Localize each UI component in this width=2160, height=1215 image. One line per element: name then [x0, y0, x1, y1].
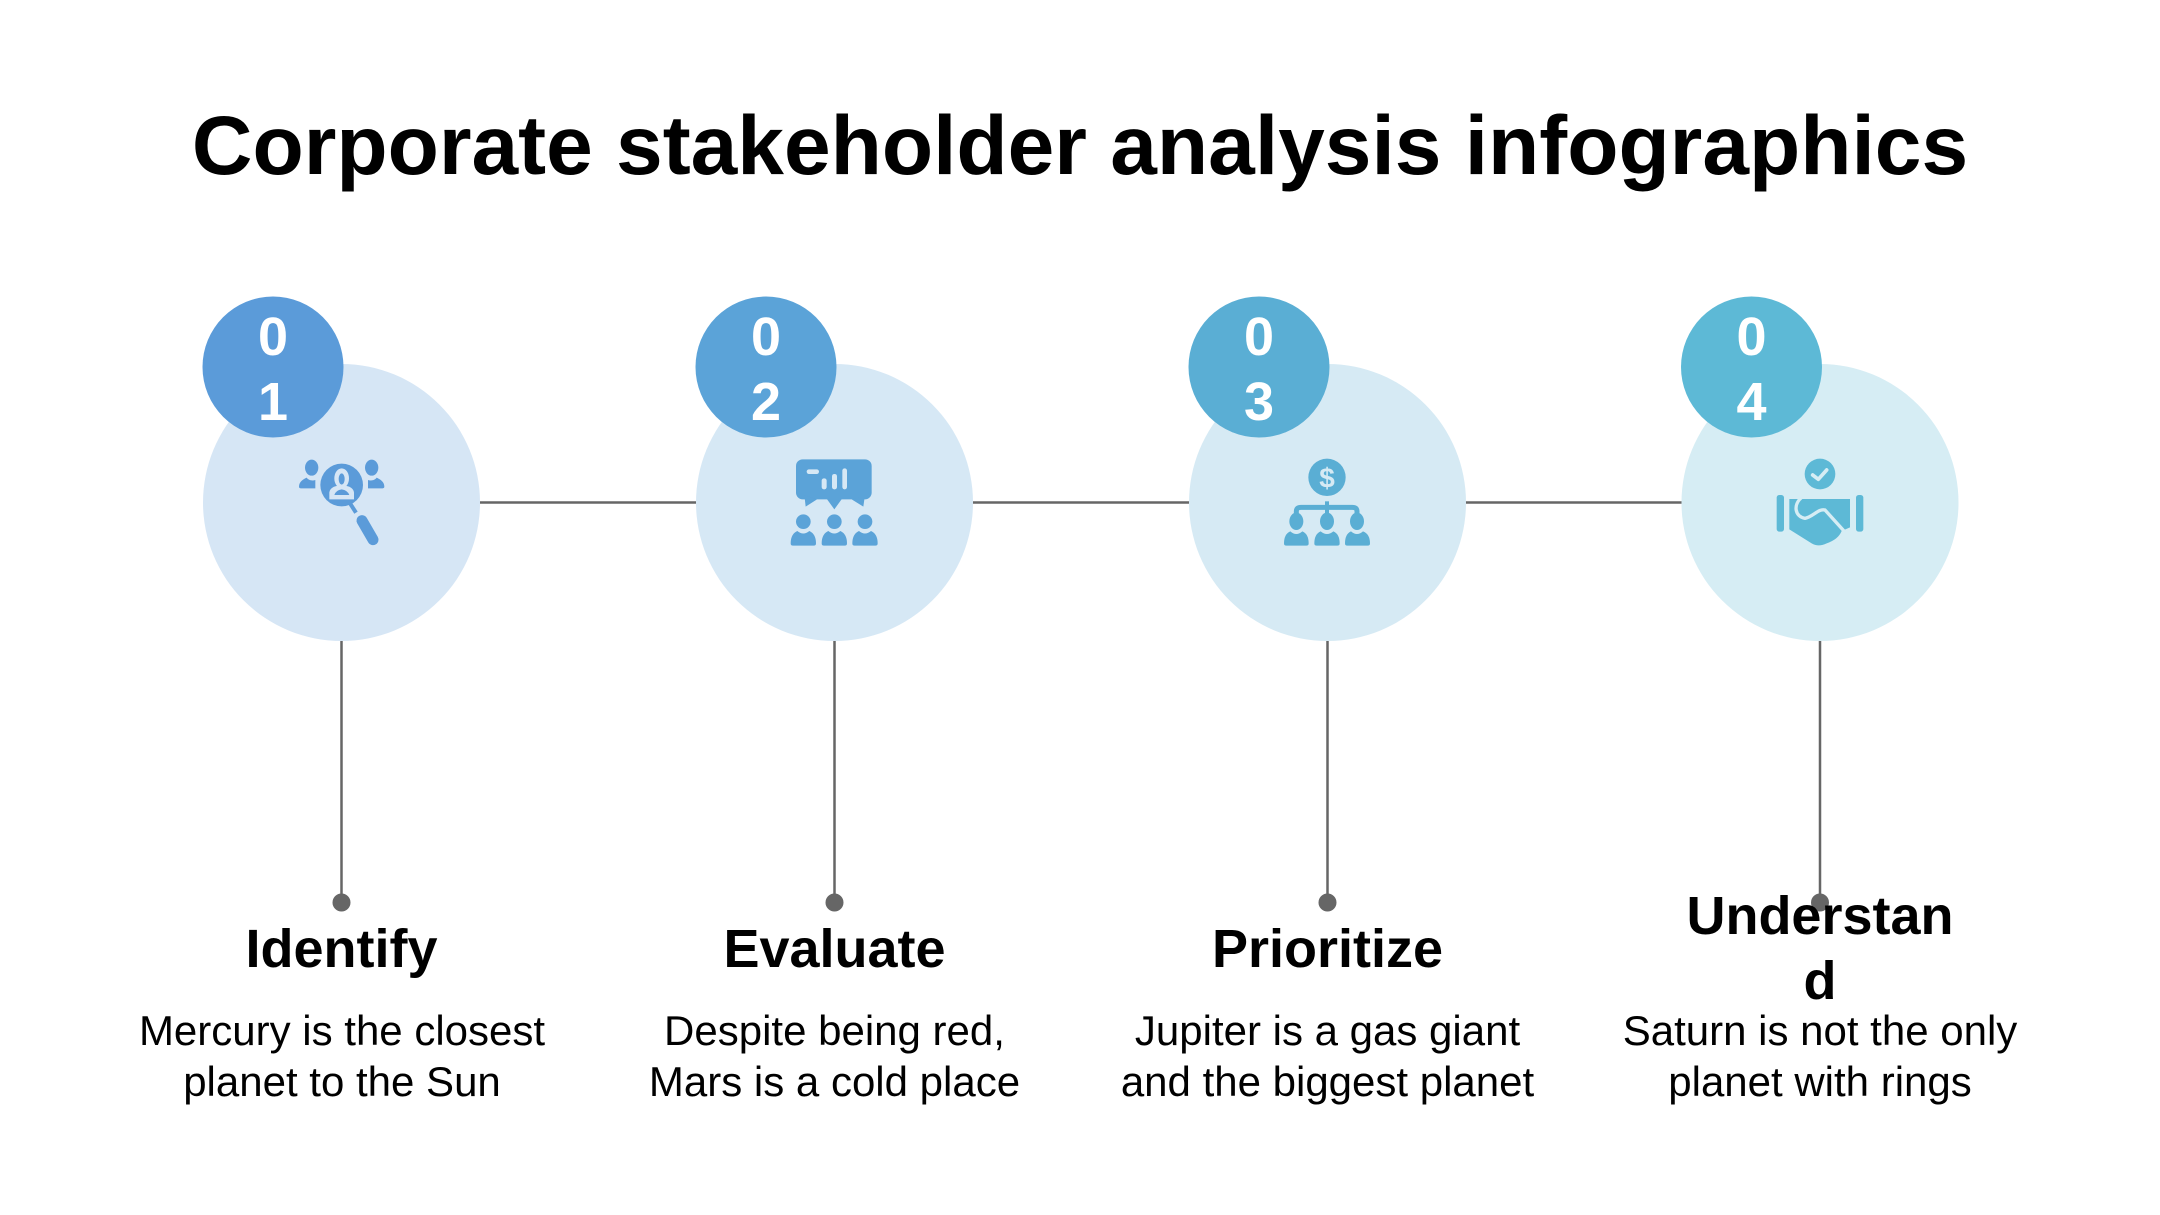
text: Prioritize description: Jupiter is a gas giant [1135, 1007, 1520, 1054]
text: Evaluate description: Mars is a cold place [649, 1058, 1020, 1105]
badge: number 03: 0 [1244, 307, 1274, 367]
text: Evaluate description: Despite being red, [664, 1007, 1005, 1054]
circle: step 4 background [1682, 364, 1958, 641]
icon: stakeholder search [299, 460, 384, 540]
circle: step 2 background [696, 364, 973, 641]
panel: step 4 understand [1623, 296, 2017, 1105]
text: Identify description: planet to the Sun [183, 1058, 501, 1105]
icon: handshake agreement [1777, 459, 1863, 545]
heading: Prioritize: Prioritize [1212, 919, 1443, 979]
connector: step 2 stem [826, 641, 844, 912]
text: Understand description: Saturn is not the only [1623, 1007, 2017, 1054]
icon: presentation to audience [791, 459, 878, 546]
connector: step 1 stem [332, 641, 350, 912]
badge: number 01 [202, 296, 344, 438]
badge: number 02: 2 [751, 372, 781, 432]
heading: Understand, wrapped: d [1804, 951, 1836, 1011]
badge: number 03: 3 [1244, 372, 1274, 432]
badge: number 04: 0 [1736, 307, 1767, 367]
badge: number 04: 4 [1736, 372, 1767, 432]
badge: number 02: 0 [751, 307, 781, 367]
badge: number 04 [1681, 296, 1822, 438]
panel: step 2 evaluate [649, 296, 1020, 1105]
text: Understand description: planet with rings [1668, 1058, 1972, 1105]
connector: step 3 stem [1318, 641, 1336, 912]
badge: number 02 [696, 296, 836, 438]
badge: number 01: 1 [258, 372, 288, 432]
panel: step 1 identify [139, 296, 545, 1105]
title: Corporate stakeholder analysis infographics [192, 98, 1968, 192]
badge: number 03 [1188, 296, 1330, 438]
text: Identify description: Mercury is the closest [139, 1007, 545, 1054]
icon: budget hierarchy: $ [1319, 462, 1335, 493]
heading: Understand, wrapped: Understan [1686, 886, 1954, 946]
connector: step 4 stem [1811, 641, 1829, 912]
heading: Identify: Identify [245, 919, 438, 979]
panel: step 3 prioritize [1121, 296, 1534, 1105]
badge: number 01: 0 [258, 307, 288, 367]
heading: Evaluate: Evaluate [723, 919, 946, 979]
circle: step 3 background [1189, 364, 1466, 641]
circle: step 1 background [203, 364, 480, 641]
icon: budget hierarchy [1284, 459, 1370, 546]
text: Prioritize description: and the biggest planet [1121, 1058, 1534, 1105]
